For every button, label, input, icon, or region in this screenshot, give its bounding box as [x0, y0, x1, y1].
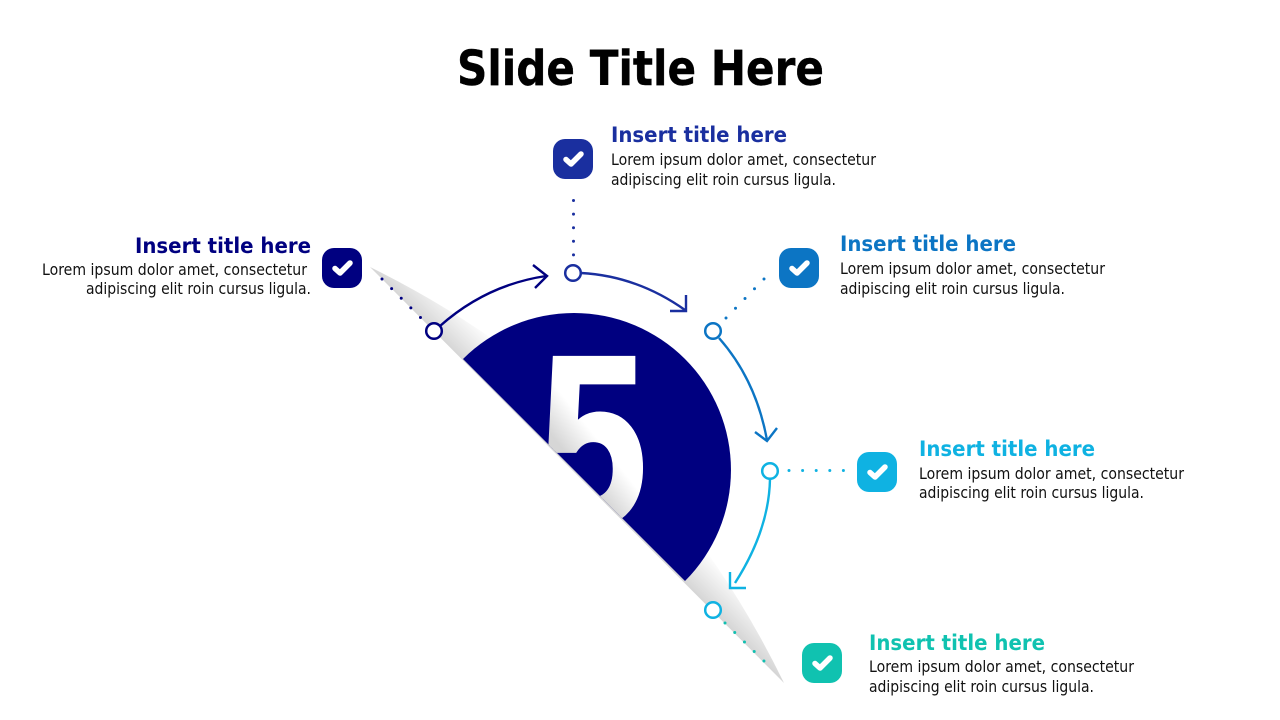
callout 1	[42, 234, 362, 298]
callout 2	[553, 123, 876, 189]
icon: check badge 1	[322, 248, 362, 288]
half circle with number 5	[463, 307, 731, 581]
icon: check badge 3	[779, 248, 819, 288]
dotted connector 5	[725, 623, 766, 663]
arrow 1	[440, 265, 547, 326]
dotted connector 3	[724, 279, 764, 320]
callout 1 text: Lorem ipsum dolor amet, consectetur	[42, 260, 307, 279]
node 3	[705, 323, 721, 339]
half circle	[463, 313, 731, 581]
callout 2 text: adipiscing elit roin cursus ligula.	[611, 170, 836, 189]
callout 2 heading: Insert title here	[611, 123, 787, 147]
shaded crescent behind half circle	[370, 267, 784, 683]
callout 4 heading: Insert title here	[919, 437, 1095, 461]
arrow 2	[581, 273, 686, 311]
callout 5 heading: Insert title here	[869, 631, 1045, 655]
callout 5	[802, 631, 1134, 696]
title: Slide Title Here	[457, 41, 824, 97]
callout 1 text: adipiscing elit roin cursus ligula.	[86, 279, 311, 298]
node 2	[565, 265, 581, 281]
callout 5 text: Lorem ipsum dolor amet, consectetur	[869, 657, 1134, 676]
number 5: 5	[540, 307, 647, 575]
callout 4	[857, 437, 1184, 502]
node 1	[426, 323, 442, 339]
icon: check badge 5	[802, 643, 842, 683]
node 5	[705, 602, 721, 618]
callout 3	[779, 232, 1105, 298]
callout 4 text: adipiscing elit roin cursus ligula.	[919, 483, 1144, 502]
icon: check badge 4	[857, 452, 897, 492]
callout 5 text: adipiscing elit roin cursus ligula.	[869, 677, 1094, 696]
dotted connector 1	[382, 279, 424, 321]
callout 4 text: Lorem ipsum dolor amet, consectetur	[919, 464, 1184, 483]
callout 3 text: Lorem ipsum dolor amet, consectetur	[840, 259, 1105, 278]
dotted connector 2	[572, 200, 575, 256]
callout 3 heading: Insert title here	[840, 232, 1016, 256]
node 4	[762, 463, 778, 479]
arrow 3	[719, 338, 777, 441]
callout 2 text: Lorem ipsum dolor amet, consectetur	[611, 150, 876, 169]
icon: check badge 2	[553, 139, 593, 179]
dotted connector 4	[789, 469, 845, 472]
callout 3 text: adipiscing elit roin cursus ligula.	[840, 279, 1065, 298]
arrow 4	[730, 479, 770, 588]
callout 1 heading: Insert title here	[135, 234, 311, 258]
